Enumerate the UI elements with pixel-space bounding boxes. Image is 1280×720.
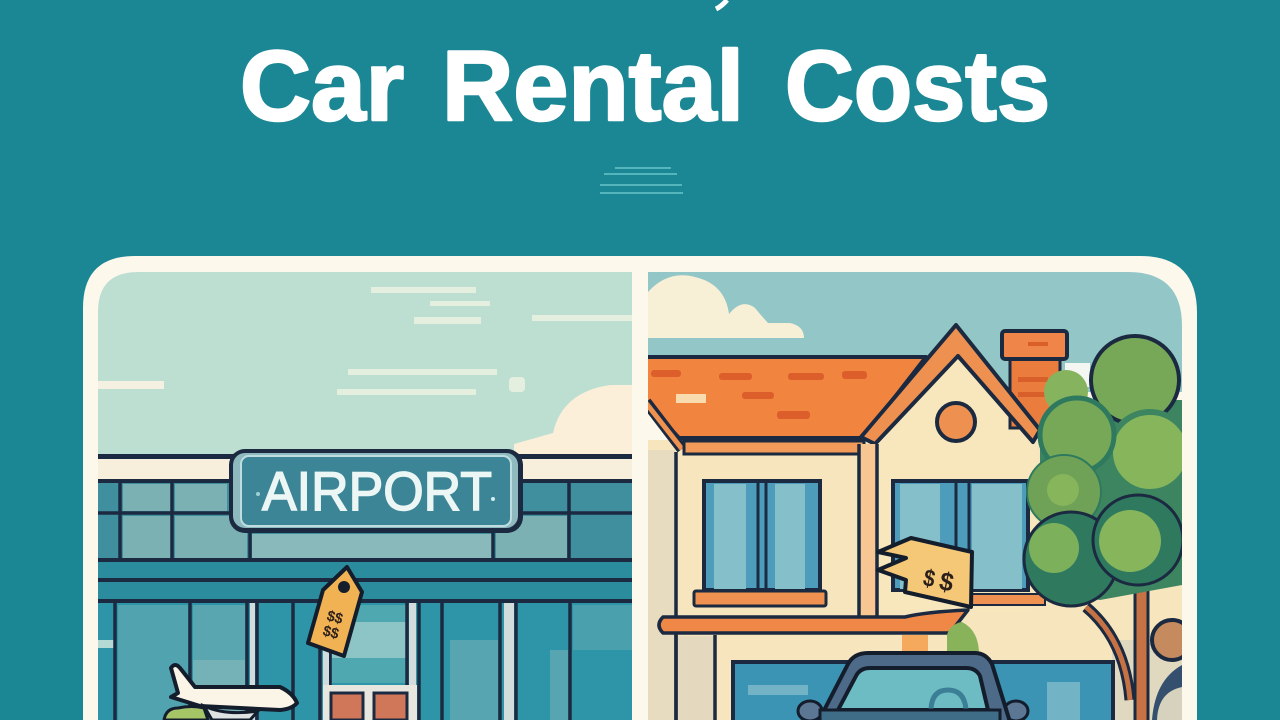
airport sky: [98, 272, 632, 462]
airport sign: [229, 449, 523, 533]
tree: [1024, 336, 1190, 720]
right window: [893, 481, 1045, 605]
gable wall: [882, 359, 1028, 440]
neighbor figure: [1150, 618, 1182, 720]
neighborhood sky: [648, 272, 1182, 392]
price tag: house: $: [921, 564, 938, 593]
heading divider lines: [600, 168, 683, 193]
price tag: airport: $$: [325, 608, 344, 628]
roof shingles: [651, 370, 867, 419]
airport clouds: [98, 287, 632, 454]
small shrub: [947, 622, 979, 652]
price tag: house: [878, 538, 972, 607]
left window: [694, 481, 826, 606]
gable round window: [937, 403, 975, 441]
icon: airplane: [171, 665, 297, 720]
upper glazing: [98, 483, 632, 560]
porch ledge: [659, 610, 968, 633]
airport door: [323, 685, 417, 720]
house wall: [648, 440, 1182, 720]
title: [240, 0, 1050, 141]
vertical trim: [860, 444, 876, 616]
garage window: [733, 662, 1113, 720]
eave: [646, 402, 682, 449]
panel: airport: [98, 272, 632, 720]
terminal upper band: [98, 458, 632, 480]
title: Car: [240, 30, 404, 141]
airport sign: AIRPORT: [262, 460, 492, 522]
illustration frame: [83, 256, 1197, 720]
price tag: airport: $$: [321, 623, 340, 643]
main roof: [646, 357, 926, 438]
neighborhood cloud: [648, 275, 804, 338]
price tag: house: $: [937, 567, 956, 598]
car: [798, 653, 1028, 720]
title: Costs: [785, 30, 1050, 141]
panel: neighborhood house: [646, 272, 1192, 720]
price tag: airport: [308, 567, 362, 656]
canopy: [98, 560, 632, 600]
title: Rental: [442, 30, 744, 141]
shrub: [164, 706, 208, 720]
gable trim: [861, 325, 1040, 444]
chimney: [1002, 331, 1090, 428]
ground floor glass: [98, 603, 632, 720]
